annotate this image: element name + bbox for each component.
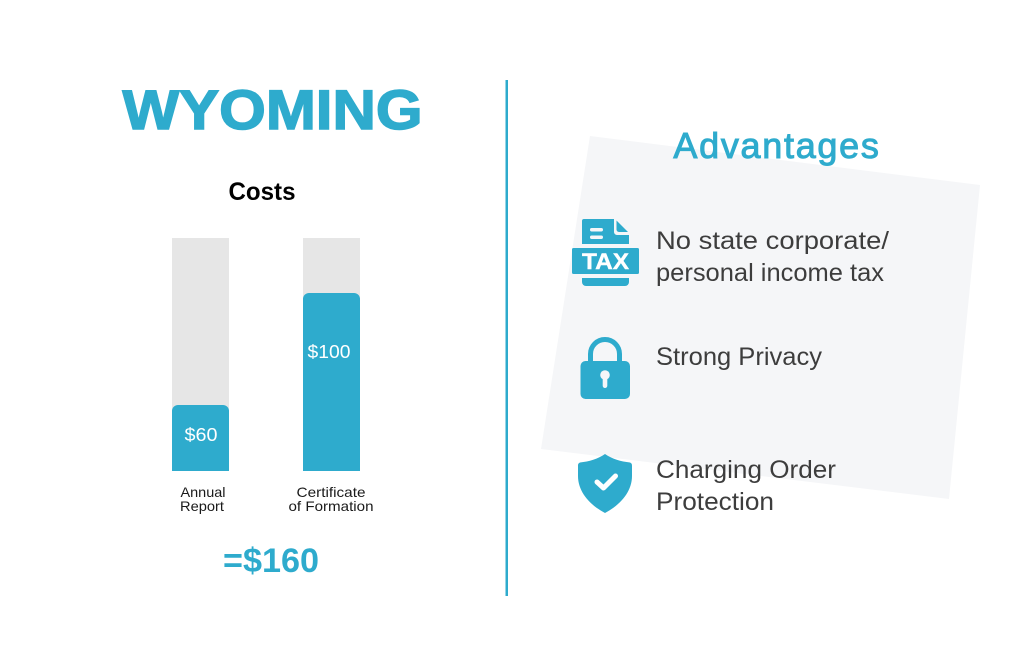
icon: tax document: TAX — [582, 249, 629, 274]
bar chart — [172, 238, 374, 514]
divider — [506, 80, 508, 596]
heading: costs: Costs — [228, 178, 296, 206]
text: no state tax: personal income tax — [656, 259, 885, 287]
bar: annual report — [172, 238, 229, 471]
bar: certificate of formation: $100 — [308, 342, 350, 362]
icon: padlock — [580, 340, 630, 399]
heading: advantages: Advantages — [673, 125, 881, 166]
label: annual report: Annual — [180, 484, 226, 500]
text: strong privacy: Strong Privacy — [656, 343, 823, 371]
bar: certificate of formation — [303, 238, 360, 471]
text: charging order protection: Charging Order — [656, 456, 836, 484]
label: annual report: Report — [180, 498, 224, 514]
total cost: =$160 — [223, 542, 319, 580]
bar: annual report: $60 — [184, 425, 218, 445]
title: WYOMING — [122, 78, 422, 141]
panel: advantages background — [541, 136, 980, 499]
icon: tax document — [572, 219, 639, 286]
label: certificate of formation: of Formation — [288, 498, 374, 514]
text: charging order protection: Protection — [656, 488, 774, 516]
text: no state tax: No state corporate/ — [656, 227, 889, 255]
label: certificate of formation: Certificate — [296, 484, 366, 500]
icon: shield — [578, 454, 632, 513]
